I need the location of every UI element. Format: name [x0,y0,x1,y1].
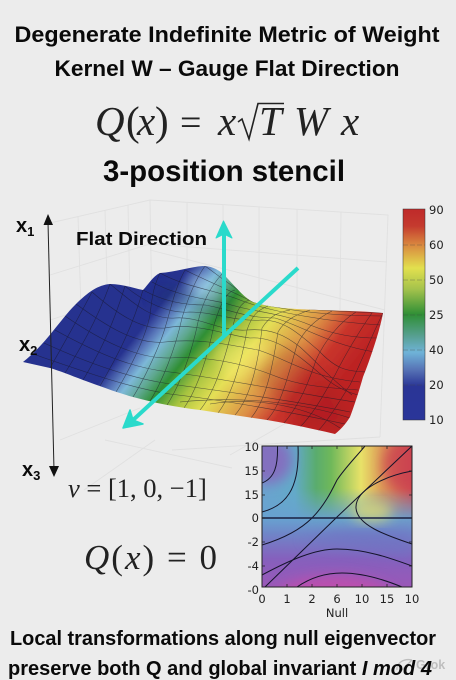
title: Degenerate Indefinite Metric of Weight [14,22,440,47]
title [14,22,440,81]
arrow: vertical flat direction [216,221,232,336]
chart x-axis labels: 2 [308,592,316,606]
chart y-axis labels: -4 [248,559,259,573]
chart y-axis labels: -2 [248,535,259,549]
chart x-axis labels: 10 [355,592,369,606]
colorbar: 60 [429,238,444,252]
chart x-axis labels: 15 [380,592,394,606]
contour lines [262,446,412,587]
formula: Q(x) = x sqrt(T) W x: x [136,98,155,144]
3D plot grid box [50,200,388,490]
colorbar: 40 [429,343,444,357]
chart x-axis labels: 0 [258,592,266,606]
chart y-axis labels: 15 [244,488,259,502]
subtitle: stencil: 3-position stencil [103,155,345,188]
label: x2: x [19,334,30,356]
formula: Q(x) = x sqrt(T) W x: T [259,98,285,144]
label: x3: 3 [33,468,40,483]
formula: Q(x) = x sqrt(T) W x: x [217,98,236,144]
formula: Q(x) = x sqrt(T) W x: ( [126,98,140,144]
formula: Q(x) = x sqrt(T) W x: = [180,102,201,144]
label: x1: 1 [27,224,34,239]
chart y-axis labels [244,440,259,597]
surface shading [150,274,350,430]
chart x-axis labels: 10 [405,592,419,606]
chart x-axis labels: 6 [333,592,341,606]
colorbar: 90 [429,203,444,217]
equation: Q(x) = 0: Q(x) = 0 [84,538,217,577]
label: flat direction: Flat Direction [76,228,207,249]
chart y-axis labels: 0 [252,511,259,525]
formula: Q(x) = x sqrt(T) W x: Q [95,98,125,144]
label: x2: 2 [30,343,37,358]
chart y-axis labels: 10 [244,440,259,454]
surface mesh [33,266,383,431]
cross lines [50,292,92,368]
colorbar: 50 [429,273,444,287]
surface plot [23,266,383,434]
inset contour chart [246,442,419,617]
label: x1: x [16,215,27,237]
chart y-axis labels: -0 [248,583,259,597]
formula: Q(x) = x sqrt(T) W x: ) [155,98,169,144]
chart x-axis labels: Null [326,606,348,620]
caption: preserve both Q and global invariant I mod 4 [8,657,433,680]
watermark: Grok [416,658,445,672]
colorbar: 20 [429,378,444,392]
axis arrow: x1 to x3 [44,214,59,477]
equation: v vector: v = [1, 0, −1] [68,473,207,503]
formula: Q(x) = x sqrt(T) W x: W [294,98,332,144]
chart x-axis labels [258,592,419,620]
label: x3: x [22,459,33,481]
chart field [262,446,412,586]
title: Kernel W – Gauge Flat Direction [54,56,400,81]
colorbar: 10 [429,413,444,427]
arrow: null eigenvector diagonal [123,268,298,428]
colorbar: 25 [429,308,444,322]
formula: Q(x) = x sqrt(T) W x [95,98,359,144]
formula: Q(x) = x sqrt(T) W x: x [340,98,359,144]
caption [8,627,436,680]
watermark [397,658,445,672]
chart y-axis labels: 15 [244,464,259,478]
colorbar [403,203,444,427]
caption: Local transformations along null eigenvector [10,627,436,650]
chart x-axis labels: 1 [283,592,291,606]
